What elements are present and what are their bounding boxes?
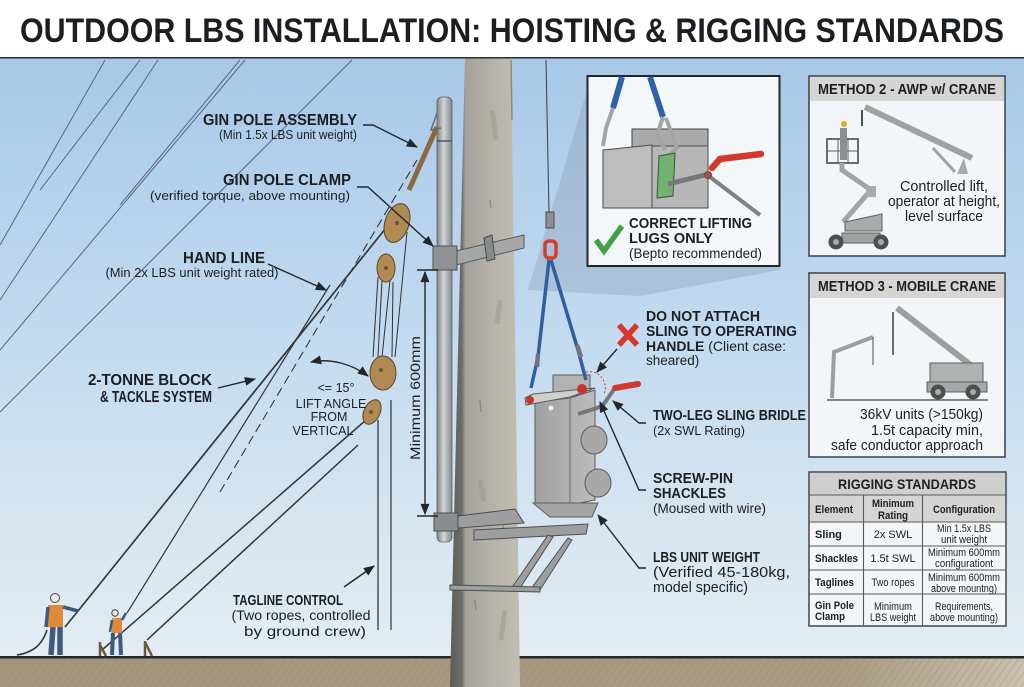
inset: unit and lug illustration <box>603 77 761 215</box>
title banner <box>0 0 1024 58</box>
panel: method 3: 36kV units (>150kg) <box>860 407 983 423</box>
table heading: RIGGING STANDARDS <box>838 476 976 492</box>
gin pole assembly boom <box>409 113 441 190</box>
panel: method 3 <box>809 273 1005 457</box>
table header row: Element <box>815 504 853 516</box>
callout: correct lifting lugs: LUGS ONLY <box>629 230 713 247</box>
table row: sling <box>815 523 991 546</box>
label: tagline control: (Two ropes, controlled <box>232 607 370 623</box>
icon: green check <box>596 226 622 251</box>
panel: method 3: safe conductor approach <box>831 438 983 454</box>
table row: shackles <box>815 547 1000 570</box>
label: lbs unit weight: LBS UNIT WEIGHT <box>653 550 760 566</box>
table row: taglines: Taglines <box>815 577 854 589</box>
icon: boom lift with operator <box>827 107 972 250</box>
label: screw-pin shackles <box>600 402 766 516</box>
label: lbs unit weight: model specific) <box>653 580 748 596</box>
warning: do not attach sling: HANDLE (Client case: <box>646 338 786 354</box>
label: screw-pin shackles: SCREW-PIN <box>653 471 733 487</box>
callout: correct lifting lugs <box>588 76 780 266</box>
table row: shackles: Minimum 600mm <box>928 547 1000 559</box>
table row: shackles: configurationt <box>935 558 993 570</box>
label: screw-pin shackles: (Moused with wire) <box>653 501 766 516</box>
lift angle annotation: FROM <box>311 410 347 424</box>
ground crew worker 1 <box>46 594 78 655</box>
gin pole clamp <box>433 235 524 270</box>
table header row: Configuration <box>933 504 995 516</box>
table row: sling: 2x SWL <box>874 529 912 541</box>
lift angle annotation: <= 15° <box>318 381 354 395</box>
label: gin pole clamp <box>150 172 433 246</box>
panel: method 2: level surface <box>905 209 983 225</box>
table header row: Rating <box>878 510 908 522</box>
table header row: Minimum <box>872 498 914 510</box>
ground stakes <box>100 641 152 656</box>
label: gin pole clamp: GIN POLE CLAMP <box>223 172 351 189</box>
table row: gin pole clamp <box>815 600 998 624</box>
panel: method 2: Controlled lift, <box>900 179 988 195</box>
ground crew worker 2 <box>110 610 126 655</box>
table row: gin pole clamp: Minimum <box>874 601 912 613</box>
table row: taglines: Minimum 600mm <box>928 572 1000 584</box>
heading: method 3: METHOD 3 - MOBILE CRANE <box>818 279 996 295</box>
label: lbs unit weight <box>598 515 790 596</box>
table row: sling: unit weight <box>941 534 987 546</box>
warning: do not attach sling: DO NOT ATTACH <box>646 309 760 325</box>
warning: do not attach sling: sheared) <box>646 353 699 368</box>
label: 2-tonne block and tackle <box>88 372 255 406</box>
label: gin pole clamp: (verified torque, above mounting) <box>150 189 350 203</box>
icon: gin pole and mobile crane <box>827 308 988 400</box>
table row: gin pole clamp: above mounting) <box>930 612 998 624</box>
table row: taglines <box>815 572 1000 595</box>
label: two-leg sling bridle: (2x SWL Rating) <box>653 424 745 438</box>
panel: method 2 <box>809 76 1005 256</box>
concrete utility pole <box>450 58 520 687</box>
table row: shackles: Shackles <box>815 553 858 565</box>
suspended LBS unit <box>525 375 611 517</box>
callout: correct lifting lugs: (Bepto recommended) <box>629 246 762 261</box>
zoom callout wedge <box>528 90 780 296</box>
lower bracket with braces <box>434 509 588 592</box>
label: two-leg sling bridle <box>613 401 806 438</box>
label: hand line: (Min 2x LBS unit weight rated) <box>106 266 278 280</box>
label: gin pole assembly: (Min 1.5x LBS unit weight) <box>219 128 357 142</box>
table row: sling: Sling <box>815 529 842 541</box>
label: tagline control: by ground crew) <box>244 623 366 639</box>
label: 2-tonne block and tackle: 2-TONNE BLOCK <box>88 372 213 389</box>
label: two-leg sling bridle: TWO-LEG SLING BRIDLE <box>653 408 806 424</box>
table row: taglines: above mountng) <box>931 583 997 595</box>
icon: red cross <box>619 325 637 345</box>
label: hand line: HAND LINE <box>183 250 265 267</box>
label: tagline control <box>232 566 374 639</box>
operating handle <box>578 384 638 414</box>
table row: gin pole clamp: LBS weight <box>870 612 916 624</box>
label: screw-pin shackles: SHACKLES <box>653 486 726 502</box>
table row: sling: Min 1.5x LBS <box>937 523 991 535</box>
block and tackle system <box>359 200 415 427</box>
table row: taglines: Two ropes <box>872 577 915 589</box>
overhead conductor lines <box>0 60 352 412</box>
table header row <box>815 498 995 522</box>
lift angle annotation <box>293 361 368 438</box>
label: lbs unit weight: (Verified 45-180kg, <box>653 565 790 581</box>
callout: correct lifting lugs: CORRECT LIFTING <box>629 215 752 232</box>
warning: do not attach sling: SLING TO OPERATING <box>646 324 797 340</box>
label: hand line <box>106 250 326 290</box>
table row: gin pole clamp: Gin Pole <box>815 600 854 612</box>
gin pole <box>437 97 452 542</box>
table row: gin pole clamp: Requirements, <box>935 601 993 613</box>
panel: method 2: operator at height, <box>888 194 1000 210</box>
label: 2-tonne block and tackle: & TACKLE SYSTEM <box>100 389 212 406</box>
label: gin pole assembly <box>203 112 417 147</box>
lift angle annotation: LIFT ANGLE <box>296 397 366 411</box>
lift angle annotation: VERTICAL <box>293 424 353 438</box>
table row: shackles: 1.5t SWL <box>870 553 916 565</box>
minimum 600mm dimension <box>407 270 438 516</box>
heading: method 2: METHOD 2 - AWP w/ CRANE <box>818 82 996 98</box>
panel: method 3: 1.5t capacity min, <box>871 423 983 439</box>
minimum 600mm dimension: Minimum 600mm <box>407 336 423 460</box>
table: rigging standards <box>809 472 1006 626</box>
table row: gin pole clamp: Clamp <box>815 611 845 623</box>
ground <box>0 656 1024 687</box>
hand line and taglines rigging ropes <box>17 160 417 655</box>
two-leg sling bridle with shackles <box>526 60 605 404</box>
label: tagline control: TAGLINE CONTROL <box>233 592 343 609</box>
label: gin pole assembly: GIN POLE ASSEMBLY <box>203 112 358 129</box>
warning: do not attach sling <box>597 309 797 372</box>
